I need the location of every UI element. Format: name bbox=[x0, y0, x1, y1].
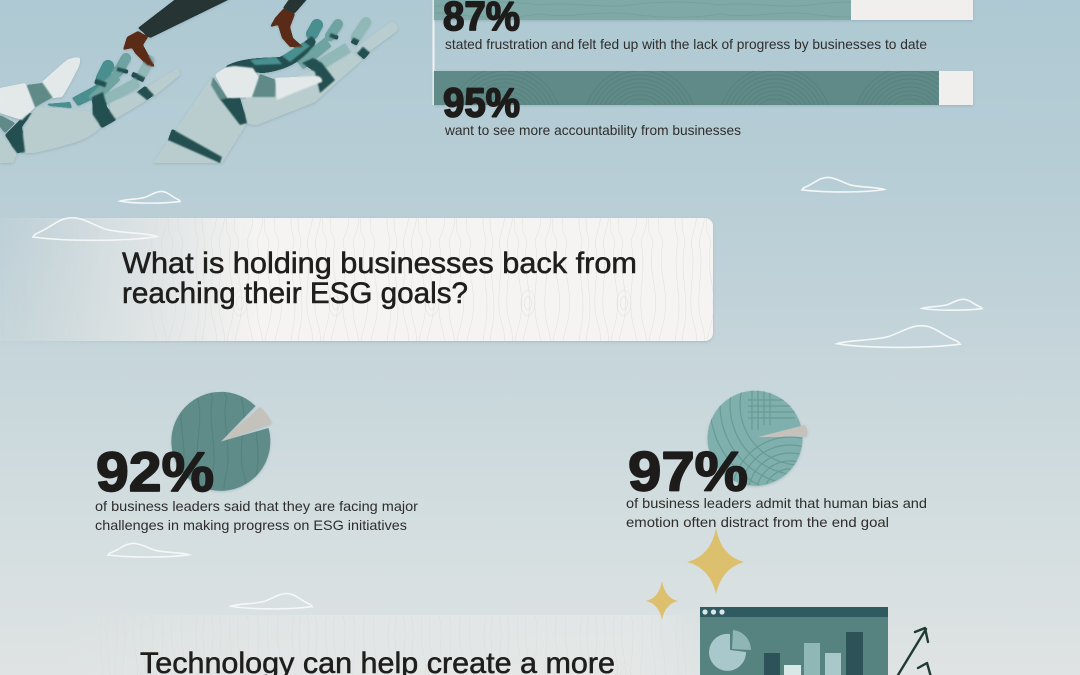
mini pie chart bbox=[709, 630, 751, 671]
stat: 95 percent bbox=[443, 80, 741, 138]
pie chart: 97 percent bbox=[706, 390, 808, 488]
bar chart: 87 percent bbox=[434, 0, 973, 20]
icon: large sparkle bbox=[687, 528, 744, 594]
axis line for bars bbox=[432, 0, 434, 105]
stat: 87 percent: stated frustration and felt fed up with the lack of progress by businesses to date bbox=[445, 36, 927, 52]
stat: 92 percent: challenges in making progress on ESG initiatives bbox=[95, 517, 407, 533]
icon: growth arrows bbox=[898, 628, 931, 675]
pie chart: 92 percent bbox=[171, 392, 272, 491]
stat: 92 percent bbox=[95, 440, 418, 533]
bar chart: 95 percent bbox=[434, 71, 973, 105]
stat: 92 percent: of business leaders said that they are facing major bbox=[95, 498, 418, 514]
mini bar chart bbox=[764, 632, 863, 675]
stat: 97 percent: 97% bbox=[628, 440, 748, 502]
robot hand: left bbox=[0, 57, 180, 163]
stat: 97 percent bbox=[626, 440, 927, 530]
icon: small sparkle bbox=[646, 581, 678, 620]
stat: 97 percent: emotion often distract from the end goal bbox=[626, 514, 889, 530]
stat: 87 percent bbox=[443, 0, 927, 52]
heading: holding businesses back: What is holding businesses back from bbox=[122, 247, 637, 280]
panel: what is holding businesses back: reaching their ESG goals? bbox=[122, 277, 468, 310]
icon: dashboard window bbox=[700, 607, 888, 675]
figure: right leg and boot bbox=[270, 0, 308, 47]
robot hand: right bbox=[153, 22, 392, 163]
panel: what is holding businesses back bbox=[0, 218, 713, 341]
illustration: robot hands holding small human figures bbox=[0, 0, 392, 163]
figure: left leg and boot bbox=[123, 0, 232, 67]
stat: 95 percent: want to see more accountability from businesses bbox=[444, 122, 741, 138]
panel: technology can help bbox=[60, 615, 700, 675]
clouds bbox=[33, 177, 982, 609]
stat: 95 percent: 95% bbox=[443, 80, 520, 126]
stat: 97 percent: of business leaders admit that human bias and bbox=[626, 495, 927, 511]
stat: 92 percent: 92% bbox=[96, 440, 214, 503]
